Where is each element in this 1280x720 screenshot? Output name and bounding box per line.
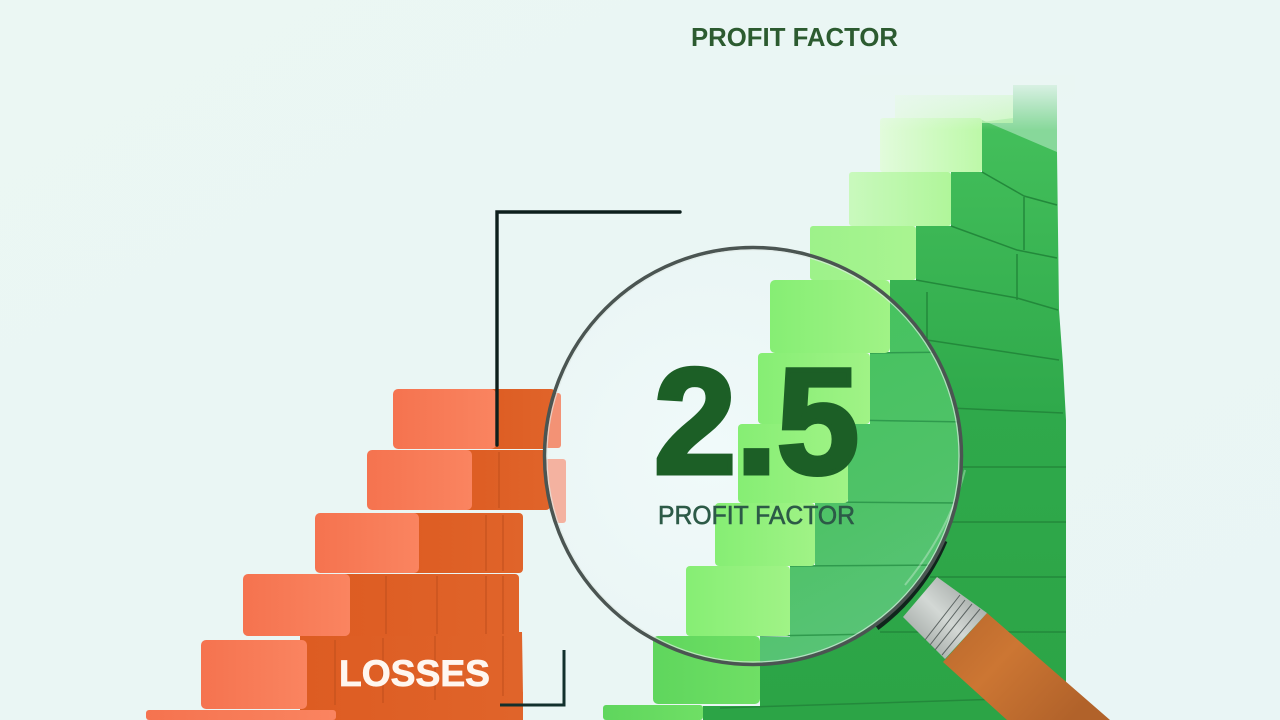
lens left orange refraction (546, 393, 566, 523)
orange brick 6 (146, 692, 523, 720)
handle: wood (943, 613, 1110, 720)
orange brick 1 (393, 389, 555, 449)
magnifying glass (544, 248, 1110, 720)
value: 2.5: 2.5 (654, 337, 859, 505)
green right wall (703, 85, 1066, 720)
lens glass backdrop (545, 248, 961, 664)
green brick staircase (603, 75, 1075, 720)
lens glare (905, 470, 965, 585)
top fade (860, 75, 1075, 130)
orange brick 5 (201, 632, 523, 709)
losses label: LOSSES (339, 653, 490, 694)
infographic canvas (146, 28, 1110, 720)
lens rim (544, 248, 962, 664)
green lit faces (603, 95, 1013, 720)
magnified wall inside lens (760, 302, 960, 663)
orange brick 2 (367, 450, 550, 510)
heading: profit factor: PROFIT FACTOR (691, 22, 898, 52)
bracket line top (497, 212, 680, 445)
bracket line bottom (500, 650, 564, 705)
rim shadow (877, 541, 945, 628)
orange brick staircase (146, 389, 555, 720)
green wall joints (720, 172, 1066, 708)
handle: metal ferrule (903, 577, 987, 659)
orange brick 3 (315, 513, 523, 573)
orange brick 4 (243, 574, 519, 636)
label: profit factor in lens: PROFIT FACTOR (658, 500, 855, 530)
